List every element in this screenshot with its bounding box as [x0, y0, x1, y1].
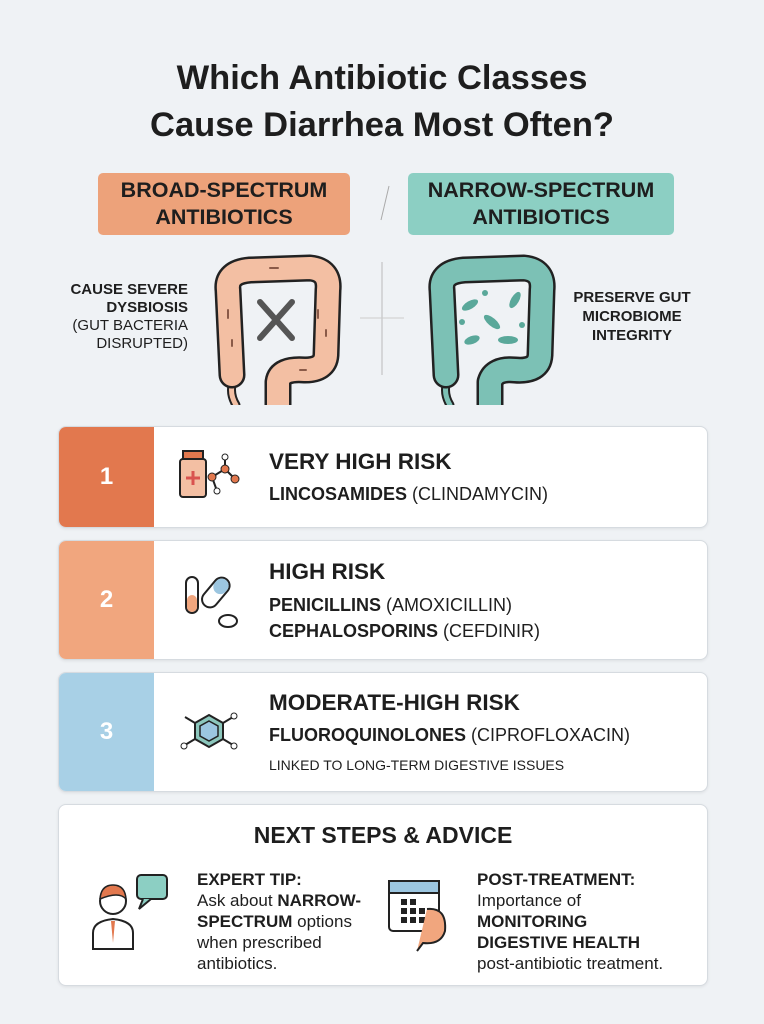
icon: molecule: [180, 712, 238, 750]
label: narrow-spectrum: [408, 173, 674, 235]
card 3: moderate-high risk: MODERATE-HIGH RISK: [269, 690, 520, 715]
card 2: high risk: HIGH RISK: [269, 559, 385, 584]
card 2: high risk: [58, 540, 708, 660]
comparison illustration: [214, 186, 556, 405]
heading: NEXT STEPS & ADVICE: [254, 822, 512, 848]
text: narrow side: PRESERVE GUT: [573, 289, 691, 306]
label: broad-spectrum: BROAD-SPECTRUM: [121, 178, 327, 202]
label: broad-spectrum: ANTIBIOTICS: [155, 205, 293, 229]
text: expert tip: antibiotics.: [197, 954, 277, 973]
label: narrow-spectrum: NARROW-SPECTRUM: [428, 178, 654, 202]
text: expert tip: SPECTRUM options: [197, 912, 352, 931]
icon: bottle: [179, 450, 240, 498]
text: post-treatment: MONITORING: [477, 912, 587, 931]
label: narrow-spectrum: ANTIBIOTICS: [472, 205, 610, 229]
text: broad side: [70, 281, 188, 352]
card 2: high risk: CEPHALOSPORINS (CEFDINIR): [269, 621, 540, 641]
card 3: moderate-high risk: [58, 672, 708, 792]
card 1: very high risk: LINCOSAMIDES (CLINDAMYCIN): [269, 484, 548, 504]
icon: doctor: [92, 874, 168, 950]
card 1: very high risk: [58, 426, 708, 528]
card 3: moderate-high risk: FLUOROQUINOLONES (CIPROFLOXACIN): [269, 725, 630, 745]
card 1: very high risk: 1: [100, 463, 113, 490]
text: post-treatment: POST-TREATMENT:: [477, 870, 635, 889]
text: broad side: DISRUPTED): [96, 335, 188, 352]
card 3: moderate-high risk: LINKED TO LONG-TERM DIGESTIVE ISSUES: [269, 757, 564, 773]
icon: disrupted colon: [228, 268, 328, 410]
text: narrow side: INTEGRITY: [592, 327, 672, 344]
title: Which Antibiotic Classes: [177, 59, 587, 97]
text: post-treatment: Importance of: [477, 891, 581, 910]
text: narrow side: MICROBIOME: [582, 308, 682, 325]
text: expert tip: [197, 870, 361, 973]
text: expert tip: EXPERT TIP:: [197, 870, 302, 889]
title: [150, 59, 614, 144]
text: post-treatment: [477, 870, 663, 973]
card 3: moderate-high risk: 3: [100, 718, 113, 745]
text: expert tip: Ask about NARROW-: [197, 891, 361, 910]
text: post-treatment: post-antibiotic treatment.: [477, 954, 663, 973]
card 1: very high risk: VERY HIGH RISK: [269, 449, 452, 474]
label: broad-spectrum: [98, 173, 350, 235]
card 2: high risk: 2: [100, 586, 113, 613]
text: expert tip: when prescribed: [197, 933, 322, 952]
panel: next steps: [58, 804, 708, 986]
text: narrow side: [573, 289, 691, 344]
icon: pills: [185, 576, 238, 628]
title: Cause Diarrhea Most Often?: [150, 106, 614, 144]
text: post-treatment: DIGESTIVE HEALTH: [477, 933, 640, 952]
icon: calendar stomach: [388, 880, 446, 952]
text: broad side: CAUSE SEVERE: [70, 281, 188, 298]
icon: healthy colon: [442, 268, 542, 410]
text: broad side: DYSBIOSIS: [106, 299, 188, 316]
card 2: high risk: PENICILLINS (AMOXICILLIN): [269, 595, 512, 615]
text: broad side: (GUT BACTERIA: [72, 317, 188, 334]
